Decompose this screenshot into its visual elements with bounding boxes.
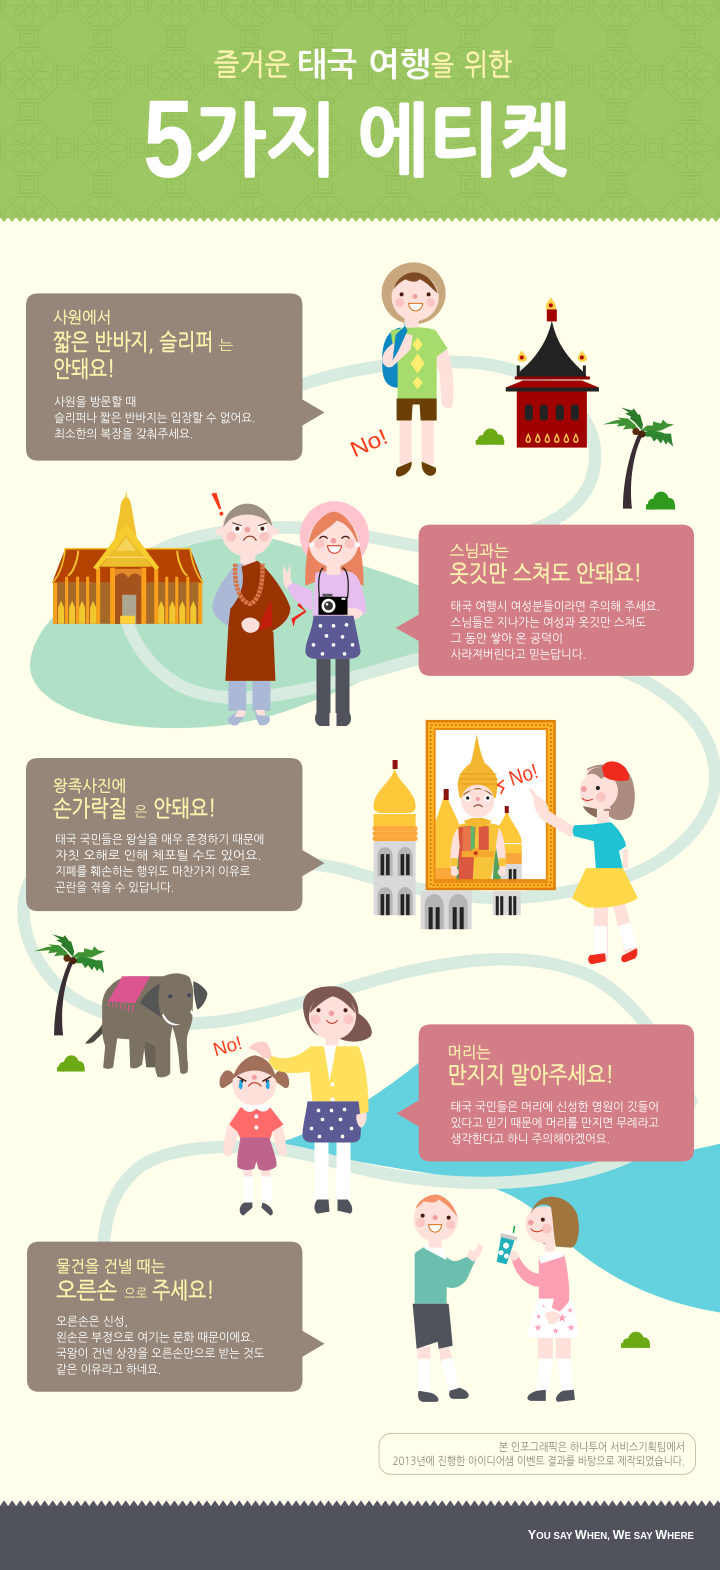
panel: bubble 4 touching heads xyxy=(397,1024,694,1162)
royal portrait frame xyxy=(426,720,556,890)
title line 1 xyxy=(214,48,512,81)
heading: bubble 4: 머리는 xyxy=(448,1044,491,1061)
heading: bubble 3: 은 xyxy=(134,805,147,820)
body text: bubble 4: 있다고 믿기 때문에 머리를 만지면 무례라고 xyxy=(451,1116,659,1129)
panel: bubble 3 royal portraits xyxy=(26,758,324,911)
heading: bubble 1: 짧은 반바지, 슬리퍼 xyxy=(53,330,213,354)
character: girl with drink: ★ xyxy=(567,1324,575,1333)
body text: bubble 4 xyxy=(451,1101,659,1145)
title line 1: 여행 xyxy=(368,48,431,81)
character: girl with drink: ★ xyxy=(567,1307,574,1315)
bush 1 xyxy=(476,429,504,445)
winding road xyxy=(24,362,715,1252)
heading: bubble 1: 는 xyxy=(218,338,233,353)
header banner xyxy=(0,0,720,223)
body text: bubble 4: 생각한다고 하니 주의해야겠어요. xyxy=(451,1133,610,1145)
heading: bubble 3: 왕족사진에 xyxy=(53,778,126,795)
footer band xyxy=(0,1500,720,1570)
heading: bubble 2 xyxy=(450,542,642,585)
bush 2 xyxy=(646,492,675,510)
character: girl with drink: ★ xyxy=(542,1305,546,1309)
icon: iced drink xyxy=(494,1223,520,1265)
body text: bubble 1: 사원을 방문할 때 xyxy=(54,396,136,408)
title line 1: 위한 xyxy=(464,50,512,80)
body text: bubble 3: 태국 국민들은 왕실을 매우 존경하기 때문에 xyxy=(55,833,264,846)
heading: bubble 3 xyxy=(53,778,216,821)
exclamation mark xyxy=(211,493,223,516)
icon: camera xyxy=(318,594,348,615)
character: monk xyxy=(212,504,290,725)
title line 1: 태국 xyxy=(297,48,357,81)
character: girl with drink: ★ xyxy=(552,1328,560,1336)
panel: bubble 1 temple dress code xyxy=(26,293,324,461)
title line 2 xyxy=(143,78,570,201)
title line 1: 즐거운 xyxy=(214,50,290,80)
body text: bubble 5: 오른손은 신성, xyxy=(56,1315,128,1327)
body text: bubble 5: 왼손은 부정으로 여기는 문화 때문이에요. xyxy=(56,1331,254,1343)
body text: bubble 4: 태국 국민들은 머리에 신성한 영원이 깃들어 xyxy=(451,1101,659,1113)
heading: bubble 2: 옷깃만 스쳐도 안돼요! xyxy=(450,561,642,585)
body text: bubble 3: 곤란을 겪을 수 있답니다. xyxy=(55,882,174,894)
palm tree 1 xyxy=(603,408,674,509)
character: boy waving xyxy=(413,1195,483,1402)
character: girl with drink: ★ xyxy=(534,1324,542,1333)
heading: bubble 5: 오른손 xyxy=(56,1279,117,1302)
character: boy with straw hat xyxy=(382,262,453,477)
title line 2: 가지 에티켓 xyxy=(195,102,570,180)
body text: bubble 1: 최소한의 복장을 갖춰주세요. xyxy=(54,427,193,440)
bush 3 xyxy=(57,1055,85,1072)
panel: bubble 2 monk contact xyxy=(396,525,694,676)
heading: bubble 1 xyxy=(53,309,233,381)
golden temple xyxy=(52,491,203,624)
character: crying girl xyxy=(220,1055,289,1216)
source note xyxy=(379,1433,696,1474)
green lake blob xyxy=(30,534,431,728)
character: girl pointing xyxy=(529,761,638,964)
source note: 본 인포그래픽은 하나투어 서비스기획팀에서 xyxy=(499,1441,685,1453)
footer slogan: YOU SAY WHEN, WE SAY WHERE xyxy=(528,1527,694,1542)
character: girl with camera xyxy=(283,501,369,726)
body text: bubble 3 xyxy=(55,833,264,894)
heading: bubble 5: 주세요! xyxy=(152,1278,214,1302)
label: No! little girl: No! xyxy=(211,1033,245,1061)
body text: bubble 3: 지폐를 훼손하는 행위도 마찬가지 이유로 xyxy=(55,866,250,878)
label: No! portrait xyxy=(498,760,541,794)
heading: bubble 2: 스님과는 xyxy=(450,542,509,559)
red pagoda xyxy=(506,297,599,448)
bush 4 xyxy=(621,1332,650,1348)
character: mother xyxy=(248,986,372,1214)
heading: bubble 4 xyxy=(448,1044,614,1087)
heading: bubble 5 xyxy=(56,1258,214,1302)
body text: bubble 2: 태국 여행시 여성분들이라면 주의해 주세요. xyxy=(451,600,660,612)
body text: bubble 5: 같은 이유라고 하네요. xyxy=(56,1362,161,1375)
body text: bubble 2 xyxy=(451,600,660,660)
body text: bubble 2: 그 동안 쌓아 온 공덕이 xyxy=(451,632,563,644)
character: king in portrait xyxy=(450,734,506,881)
elephant xyxy=(85,973,207,1077)
body text: bubble 5: 국왕이 건넨 상장을 오른손만으로 받는 것도 xyxy=(56,1346,264,1359)
heading: bubble 4: 만지지 말아주세요! xyxy=(448,1063,614,1087)
heading: bubble 3: 손가락질 xyxy=(53,797,127,821)
character: girl with drink xyxy=(494,1197,579,1402)
heading: bubble 5: 으로 xyxy=(124,1287,147,1301)
panel: bubble 5 right hand xyxy=(27,1242,324,1392)
heading: bubble 3: 안돼요! xyxy=(153,797,216,821)
body text: bubble 5 xyxy=(56,1315,264,1375)
body text: bubble 2: 스님들은 지나가는 여성과 옷깃만 스쳐도 xyxy=(451,616,646,628)
towers with spires xyxy=(373,760,521,929)
label: No! boy: No! xyxy=(346,424,391,462)
title line 2: 5 xyxy=(143,78,194,201)
character: girl with drink: ★ xyxy=(536,1314,542,1320)
heading: bubble 5: 물건을 건넬 때는 xyxy=(56,1258,165,1275)
lightning mark xyxy=(291,593,306,627)
palm tree 2 xyxy=(34,934,105,1035)
heading: bubble 1: 사원에서 xyxy=(53,309,111,326)
body text: bubble 1 xyxy=(54,396,255,440)
character: girl with drink: ★ xyxy=(557,1313,567,1324)
towers behind portrait xyxy=(436,789,522,881)
title line 1: 을 xyxy=(431,52,454,79)
body text: bubble 3: 자칫 오해로 인해 체포될 수도 있어요. xyxy=(55,850,261,862)
heading: bubble 1: 안돼요! xyxy=(53,357,115,381)
label: No! portrait: No! xyxy=(506,760,541,791)
body text: bubble 1: 슬리퍼나 짧은 반바지는 입장할 수 없어요. xyxy=(54,411,255,424)
body text: bubble 2: 사라져버린다고 믿는답니다. xyxy=(451,647,586,660)
blue lake blob xyxy=(275,1061,720,1313)
